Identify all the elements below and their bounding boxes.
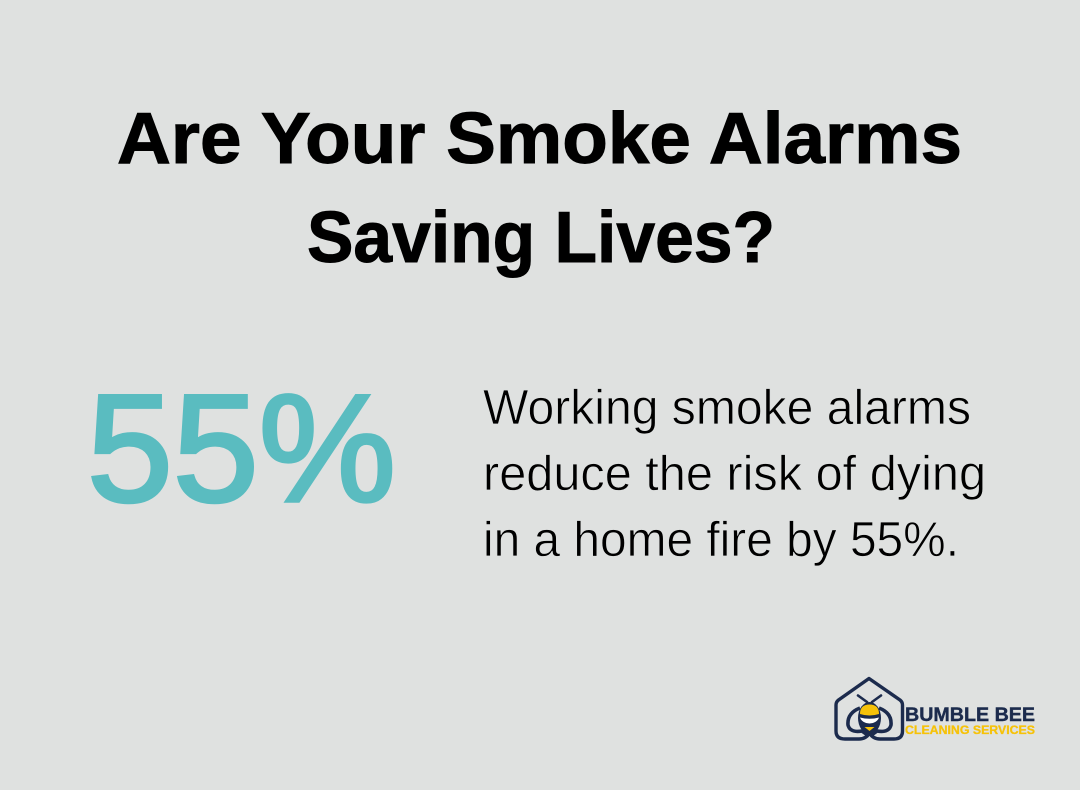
logo: Bumble Bee Cleaning Services bbox=[836, 678, 1035, 739]
title: Saving Lives? bbox=[307, 198, 775, 278]
description text bbox=[483, 381, 986, 567]
description text: Working smoke alarms bbox=[483, 381, 971, 435]
title bbox=[117, 99, 962, 278]
title: Are Your Smoke Alarms bbox=[117, 99, 962, 179]
logo tagline: CLEANING SERVICES bbox=[905, 723, 1035, 737]
icon: house with bee bbox=[836, 678, 902, 739]
description text: reduce the risk of dying bbox=[483, 447, 986, 501]
big statistic: 55%: 55% bbox=[87, 363, 396, 534]
logo name: BUMBLE BEE bbox=[905, 704, 1035, 726]
description text: in a home fire by 55%. bbox=[483, 513, 959, 567]
